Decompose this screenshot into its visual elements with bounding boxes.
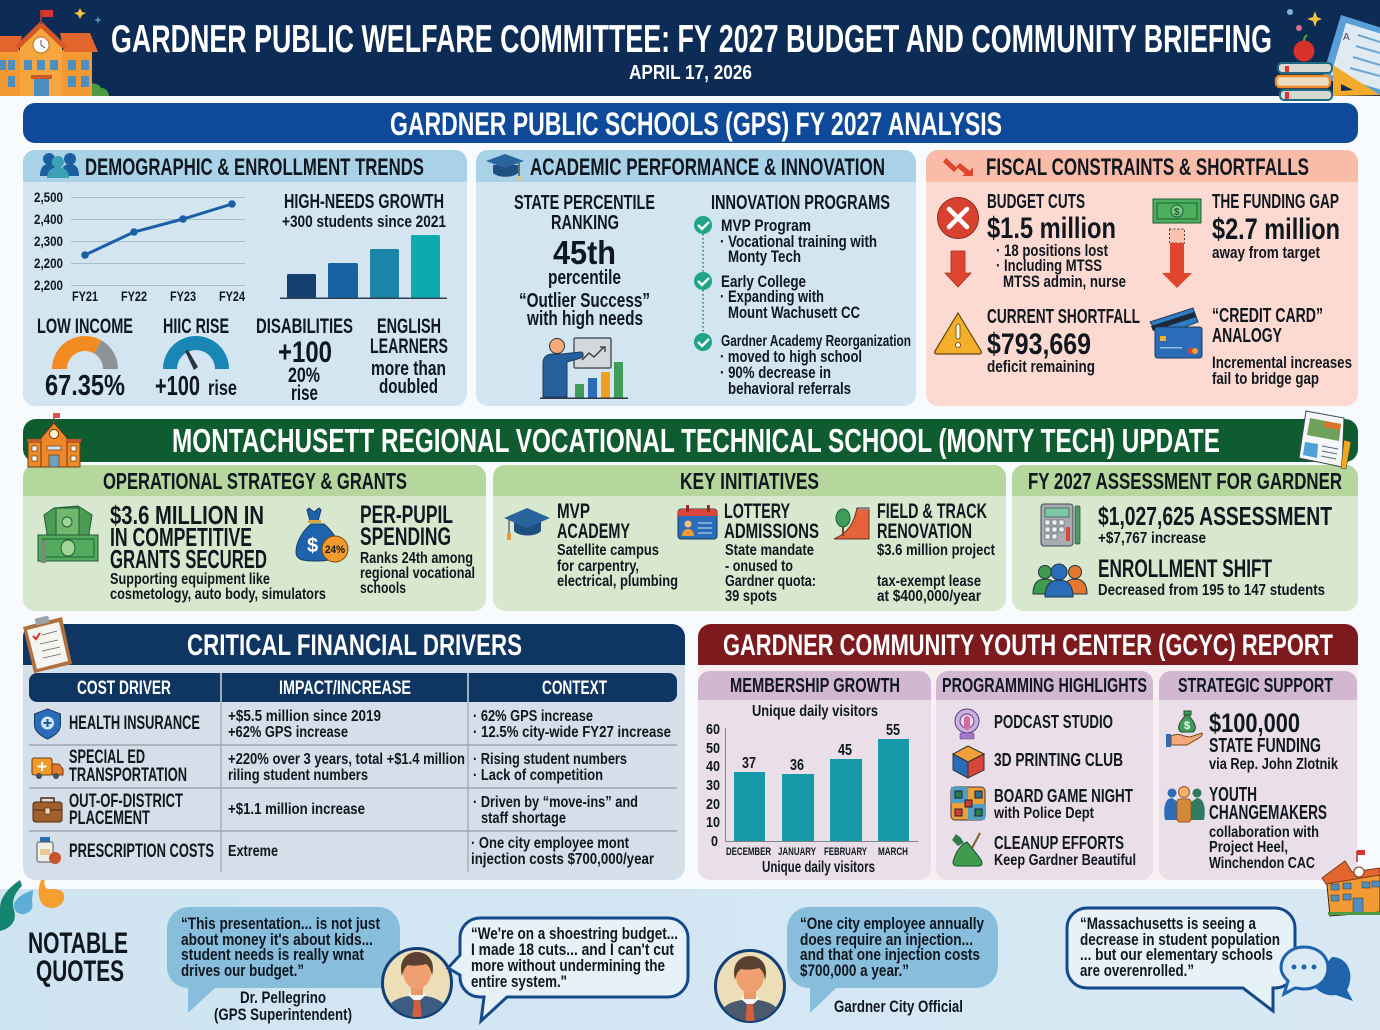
text: grants secured: cosmetology, auto body, simulators: [110, 586, 326, 603]
bar chart: daily visitors: 60: [706, 721, 720, 738]
panel: operational strategy and grants: [23, 465, 486, 611]
table row: out-of-district placement: [33, 791, 638, 829]
stat: low income gauge: LOW INCOME: [37, 315, 133, 338]
text: grants secured: GRANTS SECURED: [110, 544, 267, 574]
section banner: GPS analysis: GARDNER PUBLIC SCHOOLS (GPS) FY 2027 ANALYSIS: [390, 106, 1002, 142]
icon: lottery calendar: [678, 505, 717, 539]
quote: Dr. Pellegrino: [167, 907, 400, 1024]
text: state percentile ranking: RANKING: [551, 212, 619, 234]
icon: money bag with percent: 24%: [325, 544, 345, 556]
text: budget cuts: [987, 191, 1126, 291]
text: high-needs growth: HIGH-NEEDS GROWTH: [284, 191, 444, 213]
icon: student group: [1033, 564, 1087, 597]
icon: books, apple and paper: A: [1343, 32, 1350, 43]
quote: Dr. Pellegrino: drives our budget.”: [181, 962, 304, 980]
icon: youth changemakers: [1164, 786, 1205, 822]
bar chart: daily visitors: 45: [838, 742, 852, 759]
table row: prescription costs: Extreme: [228, 843, 278, 860]
quote: Gardner City Official: Gardner City Official: [834, 998, 963, 1016]
table row: out-of-district placement: · Driven by “move-ins” and: [473, 794, 638, 811]
quote: shoestring budget: more without undermining the: [471, 957, 665, 975]
text: podcast studio: PODCAST STUDIO: [994, 711, 1113, 732]
text: per-pupil spending: SPENDING: [360, 523, 451, 551]
quote: Dr. Pellegrino: (GPS Superintendent): [214, 1006, 352, 1024]
panel: key initiatives: [493, 465, 1006, 611]
line chart: enrollment: FY23: [170, 289, 196, 304]
stat: english learners: doubled: [379, 376, 438, 398]
panel heading: PROGRAMMING HIGHLIGHTS: [942, 674, 1147, 697]
panel: critical financial drivers: [23, 616, 685, 880]
text: youth changemakers: [1209, 784, 1327, 872]
line chart: enrollment: 2,200: [34, 256, 63, 271]
icon: hand with money bag: $: [1184, 720, 1190, 732]
line chart: enrollment: FY24: [219, 289, 245, 304]
line chart: enrollment: 2,400: [34, 212, 63, 227]
text: lottery admissions: State mandate: [725, 542, 814, 559]
text: field and track renovation: RENOVATION: [877, 520, 972, 543]
text: lottery admissions: - onused to: [725, 558, 793, 575]
table row: health insurance: · 12.5% city-wide FY27 increase: [473, 724, 671, 741]
text: MVP academy: [557, 500, 678, 590]
table grid: [29, 702, 677, 872]
panel: academic performance and innovation: [476, 150, 916, 406]
text: Gardner Academy reorganization: [720, 333, 911, 398]
line chart: enrollment: FY22: [121, 289, 147, 304]
text: early college: Mount Wachusett CC: [728, 303, 860, 322]
icon: hand with money bag: [1166, 711, 1202, 747]
quote: Massachusetts enrollment: ... but our elementary schools: [1080, 946, 1273, 964]
text: credit card analogy: fail to bridge gap: [1212, 369, 1319, 388]
table row: special ed transportation: SPECIAL ED: [69, 747, 145, 768]
text: funding gap: [1212, 191, 1340, 262]
text: youth changemakers: CHANGEMAKERS: [1209, 802, 1327, 824]
icon: portrait of superintendent: [382, 948, 452, 1020]
text: grants secured: $3.6 MILLION IN: [110, 500, 264, 530]
text: field and track renovation: at $400,000/year: [877, 588, 981, 605]
bar chart: daily visitors: 37: [742, 755, 756, 772]
section banner: GPS analysis: [23, 103, 1358, 143]
panel heading: KEY INITIATIVES: [680, 468, 819, 494]
text: per-pupil spending: Ranks 24th among: [360, 550, 473, 567]
text: state funding: via Rep. John Zlotnik: [1209, 756, 1338, 773]
bar chart: daily visitors: DECEMBER: [726, 846, 771, 858]
icon: calculator: [1041, 504, 1080, 546]
text: MVP academy: for carpentry,: [557, 558, 639, 575]
text: early college: · Expanding with: [720, 287, 824, 306]
line chart: enrollment: 2,300: [34, 234, 63, 249]
text: MVP program: Monty Tech: [728, 247, 801, 266]
text: grants secured: IN COMPETITIVE: [110, 522, 252, 552]
table row: out-of-district placement: OUT-OF-DISTRICT: [69, 791, 183, 812]
text: early college: Early College: [721, 272, 806, 291]
text: current shortfall: $793,669: [987, 328, 1091, 361]
stat: high-needs rise gauge: HIIC RISE: [163, 315, 229, 338]
text: current shortfall: deficit remaining: [987, 357, 1095, 376]
text: per-pupil spending: regional vocational: [360, 565, 475, 582]
icon: graduation cap: [486, 154, 524, 181]
table row: prescription costs: · One city employee mont: [471, 835, 630, 852]
table row: out-of-district placement: staff shortage: [481, 810, 566, 827]
quote: shoestring budget: [448, 918, 688, 1021]
quote: shoestring budget: I made 18 cuts... and I can't cut: [471, 941, 674, 959]
text: MVP program: [720, 216, 877, 266]
table row: special ed transportation: TRANSPORTATION: [69, 765, 187, 786]
text: grants secured: Supporting equipment like: [110, 571, 270, 588]
quote: Gardner City Official: [787, 907, 998, 1016]
text: funding gap: $2.7 million: [1212, 213, 1340, 246]
icon: graduation cap: [504, 508, 550, 540]
text: state percentile ranking: “Outlier Success”: [519, 290, 650, 312]
text: field and track renovation: tax-exempt lease: [877, 573, 981, 590]
text: budget cuts: · 18 positions lost: [996, 242, 1108, 260]
icon: 3D cube: [953, 746, 984, 778]
table row: health insurance: · 62% GPS increase: [473, 708, 593, 725]
quote: Dr. Pellegrino: about money it's about kids...: [181, 931, 373, 949]
table header: CONTEXT: [542, 678, 607, 699]
icon: podcast microphone: [955, 709, 979, 739]
table row: health insurance: +62% GPS increase: [228, 724, 348, 741]
icon: clipboard: [23, 616, 72, 673]
text: board game night: with Police Dept: [993, 805, 1095, 822]
quote: Gardner City Official: $700,000 a year.”: [800, 962, 909, 980]
text: youth changemakers: Project Heel,: [1209, 839, 1288, 856]
table row: special ed transportation: riling student numbers: [228, 767, 368, 784]
table row: out-of-district placement: PLACEMENT: [69, 808, 150, 829]
text: per-pupil spending: PER-PUPIL: [360, 501, 453, 529]
quote: Dr. Pellegrino: “This presentation... is not just: [181, 915, 380, 933]
panel heading: DEMOGRAPHIC & ENROLLMENT TRENDS: [85, 154, 424, 181]
bar chart: daily visitors: MARCH: [878, 846, 908, 858]
text: lottery admissions: Gardner quota:: [725, 573, 816, 590]
stat: disabilities: 20%: [288, 364, 320, 387]
table row: health insurance: +$5.5 million since 2019: [228, 708, 381, 725]
stat: high-needs rise gauge: [155, 315, 237, 401]
bar chart: daily visitors: FEBRUARY: [824, 846, 867, 858]
text: field and track renovation: [877, 500, 995, 605]
text: youth changemakers: collaboration with: [1209, 824, 1319, 841]
text: state funding: [1209, 708, 1338, 773]
panel heading: OPERATIONAL STRATEGY & GRANTS: [103, 468, 407, 494]
table row: health insurance: [34, 708, 671, 741]
quote: Dr. Pellegrino: student needs is really wnat: [181, 946, 364, 964]
stat: english learners: LEARNERS: [370, 335, 448, 358]
table row: prescription costs: [37, 835, 654, 868]
text: enrollment shift: ENROLLMENT SHIFT: [1098, 555, 1272, 583]
icon: board game: [951, 787, 985, 820]
stat: disabilities: [256, 315, 353, 405]
icon: dollar bill and arrow: $: [1174, 207, 1180, 218]
text: Gardner Academy reorganization: · moved to high school: [720, 347, 862, 366]
text: youth changemakers: YOUTH: [1209, 784, 1257, 806]
text: youth changemakers: Winchendon CAC: [1209, 855, 1315, 872]
heading: notable quotes: NOTABLE: [28, 927, 128, 960]
text: lottery admissions: 39 spots: [725, 588, 777, 605]
text: lottery admissions: [724, 500, 819, 605]
text: field and track renovation: $3.6 million project: [877, 542, 995, 559]
quote: Massachusetts enrollment: [1067, 908, 1295, 1011]
table row: special ed transportation: +220% over 3 years, total +$1.4 million: [228, 751, 465, 768]
stat: disabilities: +100: [278, 336, 332, 369]
icon: newspaper and pencil: [1299, 411, 1351, 469]
table row: prescription costs: PRESCRIPTION COSTS: [69, 841, 214, 862]
bar chart: daily visitors: JANUARY: [778, 846, 816, 858]
text: budget cuts: · Including MTSS: [996, 257, 1102, 275]
text: MVP academy: Satellite campus: [557, 542, 659, 559]
text: credit card analogy: ANALOGY: [1212, 325, 1282, 347]
table header: [29, 673, 677, 702]
text: board game night: [993, 785, 1134, 822]
table row: special ed transportation: [32, 747, 627, 786]
table header: COST DRIVER: [77, 678, 171, 699]
icon: falling arrow: [943, 158, 973, 176]
text: budget cuts: MTSS admin, nurse: [1003, 273, 1126, 291]
text: high-needs growth: [282, 191, 446, 231]
quote: Massachusetts enrollment: “Massachusetts is seeing a: [1080, 915, 1257, 933]
text: funding gap: away from target: [1212, 243, 1320, 262]
heading: notable quotes: QUOTES: [36, 955, 124, 988]
icon: portrait of city official: [716, 950, 784, 1024]
text: assessment: [1098, 501, 1332, 547]
panel: membership growth: [698, 671, 931, 880]
text: enrollment shift: Decreased from 195 to 147 students: [1098, 582, 1325, 599]
text: per-pupil spending: schools: [360, 580, 406, 597]
panel heading: MEMBERSHIP GROWTH: [730, 674, 900, 697]
icon: credit cards: [1150, 308, 1202, 358]
text: 3D printing club: 3D PRINTING CLUB: [994, 749, 1123, 770]
table row: special ed transportation: · Rising student numbers: [473, 751, 627, 768]
icon: broom and bag: [952, 833, 982, 866]
stat: high-needs rise gauge: +100: [155, 370, 200, 401]
stat: english learners: [370, 315, 448, 398]
text: lottery admissions: ADMISSIONS: [724, 520, 819, 543]
icon: track and tree: [834, 507, 869, 539]
quote: Gardner City Official: does require an injection...: [800, 931, 973, 949]
table header: IMPACT/INCREASE: [279, 678, 411, 699]
bar chart: daily visitors: 20: [706, 796, 720, 813]
table row: prescription costs: injection costs $700,000/year: [471, 851, 654, 868]
panel: strategic support: [1159, 671, 1357, 880]
line chart: enrollment: [34, 190, 245, 304]
stat: english learners: more than: [371, 358, 446, 380]
text: credit card analogy: [1212, 305, 1352, 388]
quote strip background: [0, 889, 1380, 1030]
icon: people: [40, 153, 79, 178]
stat: low income gauge: [37, 315, 133, 402]
text: MVP academy: MVP: [557, 500, 590, 523]
text: current shortfall: CURRENT SHORTFALL: [987, 306, 1140, 328]
text: lottery admissions: LOTTERY: [724, 500, 790, 523]
text: high-needs growth: +300 students since 2021: [282, 212, 446, 231]
panel: demographic and enrollment trends: [23, 150, 467, 406]
text: grants secured: [110, 500, 326, 603]
quote: Gardner City Official: “One city employee annually: [800, 915, 985, 933]
line chart: enrollment: 2,500: [34, 190, 63, 205]
bar chart: daily visitors: 0: [711, 833, 718, 850]
text: MVP program: MVP Program: [721, 216, 811, 235]
text: MVP program: · Vocational training with: [720, 232, 877, 251]
bar chart: daily visitors: 30: [706, 777, 720, 794]
text: per-pupil spending: [360, 501, 475, 597]
icon: books, apple and paper: [1276, 9, 1380, 100]
bar chart: daily visitors: 36: [790, 757, 804, 774]
icon: school on green banner: [27, 413, 81, 467]
stat: english learners: ENGLISH: [377, 315, 441, 338]
icon: dollar bill and arrow: [1153, 199, 1201, 288]
icon: quotation marks: [0, 880, 64, 931]
text: Gardner Academy reorganization: behavioral referrals: [728, 379, 851, 398]
text: Gardner Academy reorganization: Gardner Academy Reorganization: [721, 333, 911, 350]
bar chart: daily visitors: 55: [886, 722, 900, 739]
text: early college: [720, 272, 860, 322]
icon: warning triangle: [935, 313, 981, 354]
panel heading: CRITICAL FINANCIAL DRIVERS: [187, 629, 522, 662]
text: cleanup efforts: CLEANUP EFFORTS: [994, 832, 1124, 853]
quote: Massachusetts enrollment: are overenrolled.”: [1080, 962, 1194, 980]
panel heading: ACADEMIC PERFORMANCE & INNOVATION: [530, 154, 885, 181]
text: budget cuts: BUDGET CUTS: [987, 191, 1085, 213]
text: budget cuts: $1.5 million: [987, 212, 1116, 245]
quote: shoestring budget: entire system.": [471, 973, 567, 991]
text: state funding: STATE FUNDING: [1209, 735, 1321, 757]
text: state percentile ranking: with high needs: [526, 308, 643, 330]
quote: Gardner City Official: and that one injection costs: [800, 946, 980, 964]
bar chart: daily visitors: 50: [706, 740, 720, 757]
heading: innovation programs: INNOVATION PROGRAMS: [711, 192, 890, 214]
text: state funding: $100,000: [1209, 708, 1300, 738]
text: MVP academy: electrical, plumbing: [557, 573, 678, 590]
text: cleanup efforts: [994, 832, 1136, 869]
text: state percentile ranking: percentile: [548, 267, 621, 289]
text: credit card analogy: “CREDIT CARD”: [1212, 305, 1323, 327]
icon: school building: [0, 8, 109, 96]
icon: presenter with chart: [540, 338, 628, 399]
icon: checklist timeline: [694, 216, 712, 351]
quote: Dr. Pellegrino: Dr. Pellegrino: [240, 989, 326, 1007]
icon: chat bubbles: [1281, 947, 1353, 1001]
bar chart: daily visitors: [706, 703, 918, 876]
line chart: enrollment: FY21: [72, 289, 98, 304]
icon: stack of money: [38, 506, 98, 563]
quote: shoestring budget: “We're on a shoestring budget...: [471, 925, 678, 943]
icon: money bag with percent: $: [307, 535, 318, 557]
text: cleanup efforts: Keep Gardner Beautiful: [994, 852, 1136, 869]
text: board game night: BOARD GAME NIGHT: [994, 785, 1134, 806]
header banner: [0, 0, 1380, 100]
panel: programming highlights: [936, 671, 1153, 880]
heading: notable quotes: [28, 927, 128, 988]
bar chart: daily visitors: Unique daily visitors: [762, 859, 875, 876]
text: field and track renovation: FIELD & TRACK: [877, 500, 987, 523]
text: Gardner Academy reorganization: · 90% decrease in: [720, 363, 831, 382]
text: state percentile ranking: 45th: [553, 234, 616, 271]
text: assessment: +$7,767 increase: [1098, 530, 1206, 547]
quote: Massachusetts enrollment: decrease in student population: [1080, 931, 1280, 949]
line chart: enrollment: 2,200: [34, 278, 63, 293]
bar chart: high-needs growth: [280, 235, 447, 299]
text: state percentile ranking: [514, 192, 655, 330]
stat: disabilities: DISABILITIES: [256, 315, 353, 338]
table row: special ed transportation: · Lack of competition: [473, 767, 603, 784]
icon: cut mark and arrow: [938, 198, 978, 287]
table row: out-of-district placement: +$1.1 million increase: [228, 801, 365, 818]
section banner: Gardner Community Youth Center: [698, 624, 1358, 880]
stat: high-needs rise gauge: rise: [208, 377, 237, 400]
stat: low income gauge: 67.35%: [45, 370, 125, 402]
text: MVP academy: ACADEMY: [557, 520, 630, 543]
table row: health insurance: HEALTH INSURANCE: [69, 713, 200, 734]
text: state percentile ranking: STATE PERCENTILE: [514, 192, 655, 214]
icon: small school: [1322, 850, 1380, 916]
panel: FY 2027 assessment for Gardner: [1012, 465, 1358, 611]
bar chart: daily visitors: 40: [706, 758, 720, 775]
stat: disabilities: rise: [291, 382, 318, 405]
bar chart: daily visitors: 10: [706, 814, 720, 831]
text: current shortfall: [987, 306, 1140, 376]
text: enrollment shift: [1098, 555, 1325, 599]
date: APRIL 17, 2026: [629, 62, 752, 84]
bar chart: daily visitors: Unique daily visitors: [752, 703, 878, 720]
icon: money bag with percent: [296, 508, 348, 562]
panel: fiscal constraints and shortfalls: [926, 150, 1358, 406]
